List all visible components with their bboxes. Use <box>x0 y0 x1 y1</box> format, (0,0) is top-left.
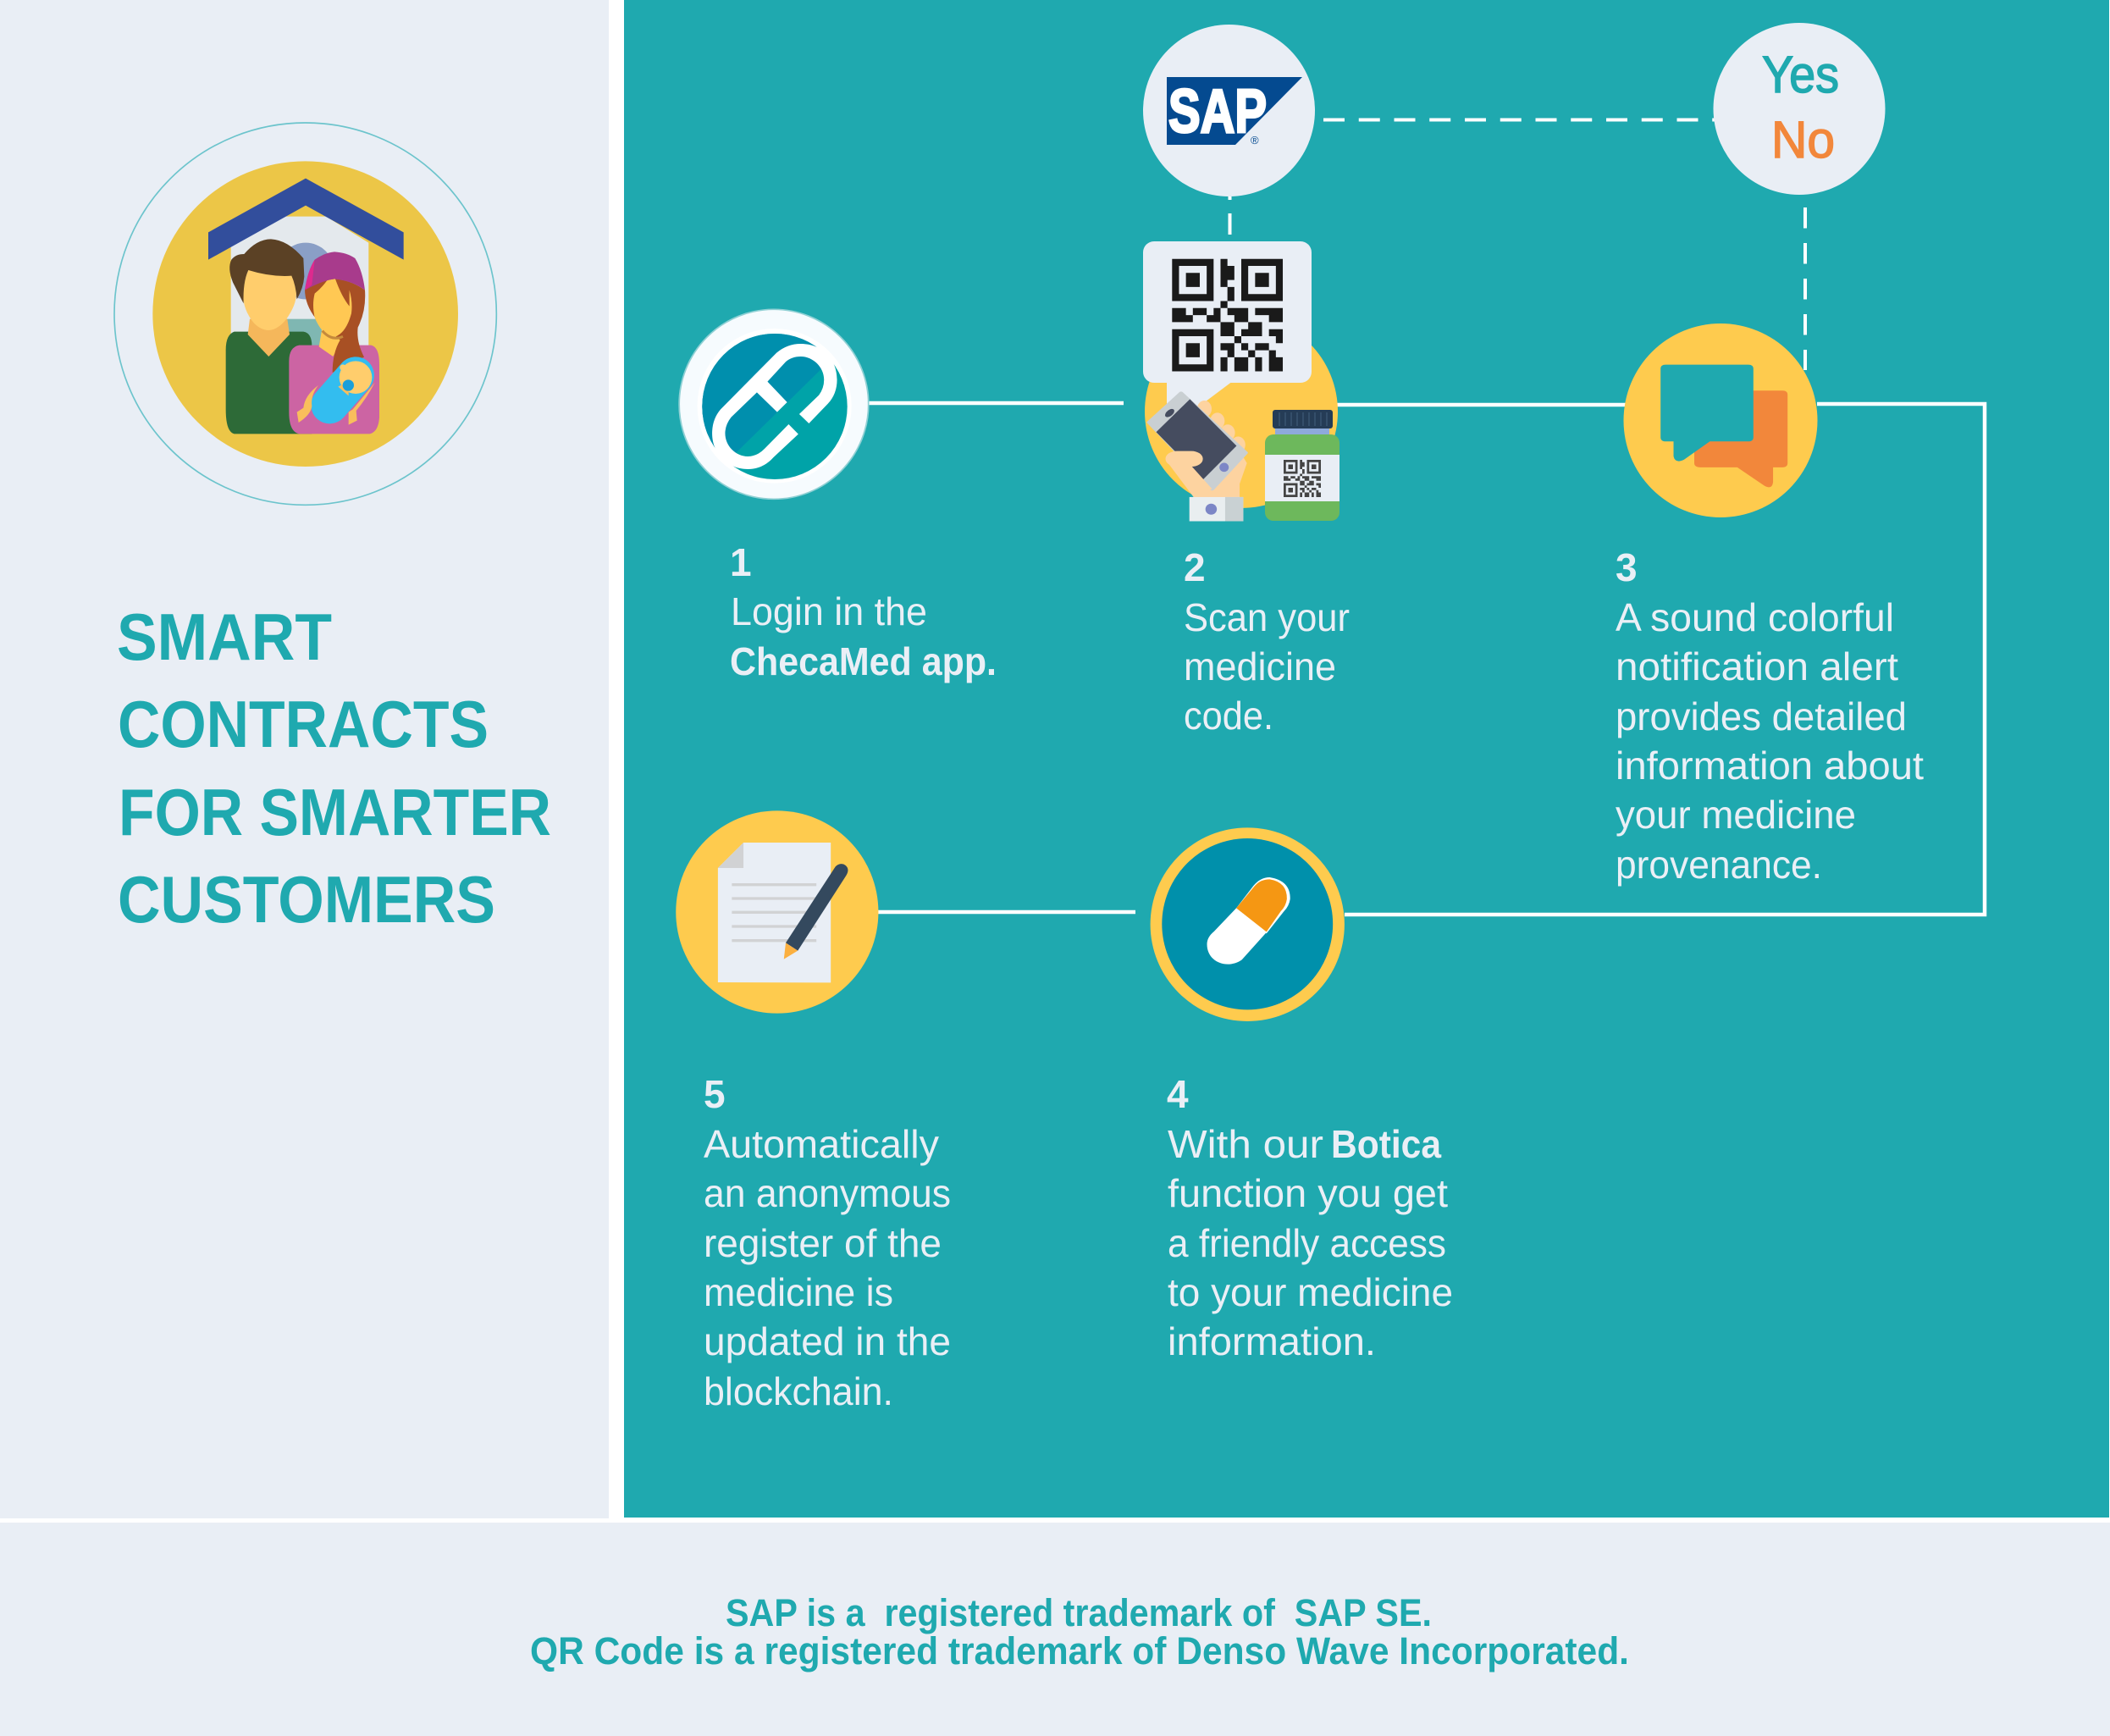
title: CUSTOMERS <box>118 862 495 937</box>
step 2 text: 2 <box>1184 545 1206 589</box>
step 4 text <box>1167 1072 1453 1363</box>
step 2 text: medicine <box>1184 644 1336 688</box>
icon: step 1 app logo <box>679 309 869 499</box>
medicine bottle <box>1265 410 1339 521</box>
icon: step 2 scanning QR with phone and bottle <box>1143 241 1339 522</box>
step 2 text: Scan your <box>1184 595 1350 639</box>
step 5 text: Automatically <box>704 1122 939 1166</box>
panel: process steps <box>624 0 2109 1518</box>
step 5 text: register of the <box>704 1221 942 1265</box>
QR speech bubble <box>1143 241 1312 406</box>
step 3 text: notification alert <box>1616 644 1898 688</box>
connector: step 1 to step 2 <box>869 401 1124 405</box>
icon: yes no circle: No <box>1771 111 1835 169</box>
step 5 text: an anonymous <box>704 1171 951 1215</box>
connector: SAP to yes/no dashed <box>1323 119 1717 122</box>
step 5 text: updated in the <box>704 1319 951 1363</box>
step 3 text <box>1616 545 1924 887</box>
icon: SAP circle: SAP <box>1168 78 1267 146</box>
step 1 text: Login in the <box>731 589 927 633</box>
step 3 text: 3 <box>1616 545 1638 589</box>
icon: yes no circle <box>1714 23 1885 195</box>
step 4 text: 4 <box>1167 1072 1189 1116</box>
step 5 text: 5 <box>704 1072 726 1116</box>
icon: SAP circle: ® <box>1251 134 1259 147</box>
step 1 text: ChecaMed app. <box>730 639 997 683</box>
step 1 text: 1 <box>730 540 752 584</box>
step 4 text: to your medicine <box>1168 1270 1453 1314</box>
panel: footer <box>0 1523 2110 1736</box>
hand holding phone <box>1149 393 1247 522</box>
step 3 text: A sound colorful <box>1616 595 1894 639</box>
step 5 text: blockchain. <box>704 1369 893 1413</box>
step 1 text <box>730 540 997 683</box>
icon: step 3 chat bubbles <box>1624 323 1817 517</box>
footer trademark text: SAP is a registered trademark of SAP SE. <box>726 1591 1432 1634</box>
step 4 text: Botica <box>1331 1122 1441 1166</box>
step 2 text: code. <box>1184 694 1273 738</box>
step 4 text: information. <box>1168 1319 1376 1363</box>
footer trademark text: QR Code is a registered trademark of Denso Wave Incorporated. <box>530 1629 1629 1672</box>
connector: yes/no to step 3 dashed <box>1803 207 1807 370</box>
title: FOR SMARTER <box>119 775 551 849</box>
title: SMART <box>117 600 332 674</box>
step 5 text: medicine is <box>704 1270 893 1314</box>
step 2 text <box>1184 545 1350 738</box>
title: CONTRACTS <box>118 687 489 761</box>
connector: step 2 to step 3 <box>1334 403 1626 406</box>
icon: SAP circle <box>1143 25 1315 196</box>
step 3 text: your medicine <box>1616 793 1856 837</box>
step 5 text <box>704 1072 951 1413</box>
connector: step 4 to step 5 <box>878 910 1135 914</box>
icon: step 4 capsule <box>1151 827 1345 1021</box>
title <box>117 600 551 937</box>
icon: yes no circle: Yes <box>1762 46 1839 103</box>
step 3 text: provides detailed <box>1616 694 1907 738</box>
icon: step 5 document and pencil <box>676 810 878 1014</box>
icon: family in house <box>114 123 496 505</box>
step 4 text: function you get <box>1168 1171 1448 1215</box>
panel: left sidebar <box>0 0 609 1518</box>
connector: step 3 to step 4 <box>1345 404 1985 915</box>
step 3 text: provenance. <box>1616 843 1822 887</box>
step 4 text: With our <box>1168 1122 1323 1166</box>
step 3 text: information about <box>1616 744 1924 788</box>
connector: SAP to QR dashed <box>1228 196 1231 235</box>
step 4 text: a friendly access <box>1168 1221 1446 1265</box>
footer trademark text <box>530 1591 1629 1672</box>
